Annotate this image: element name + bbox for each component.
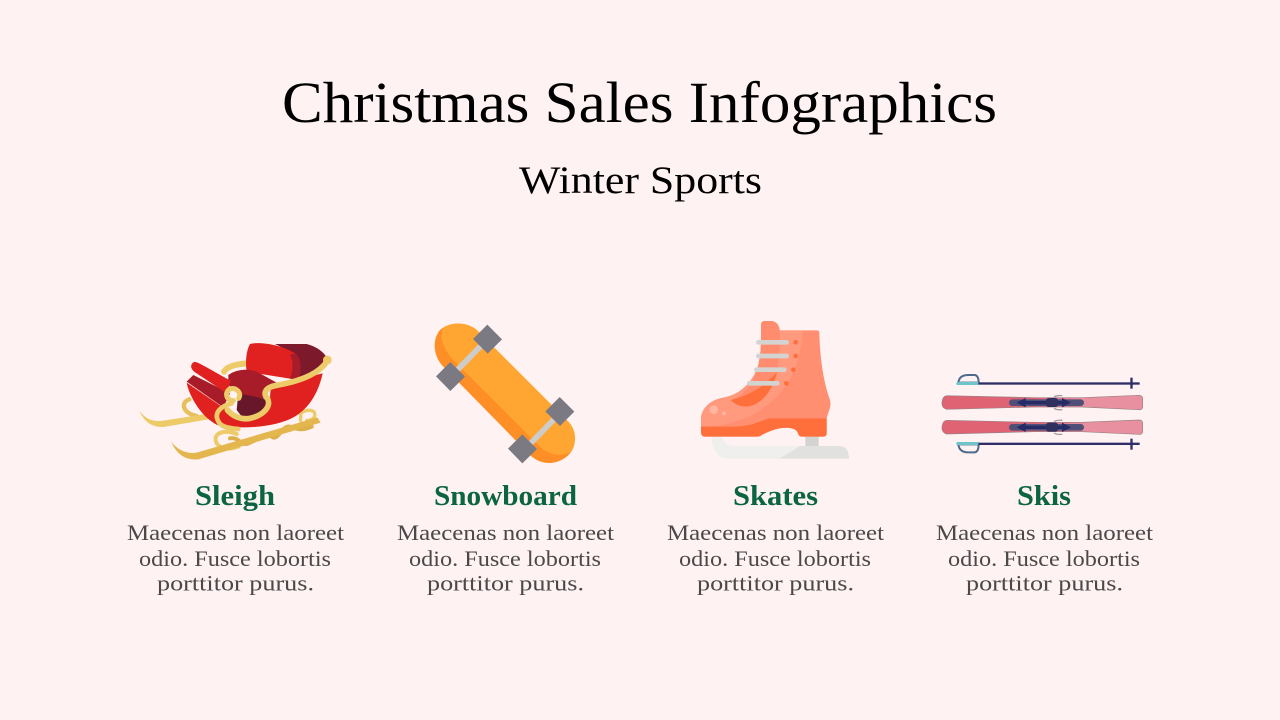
heading: Snowboard: Snowboard (434, 481, 577, 512)
panel: skis (936, 375, 1153, 596)
text block: Skates description: Maecenas non laoreet (667, 520, 884, 545)
icon: snowboard (435, 324, 575, 463)
heading: Skis: Skis (1017, 481, 1071, 512)
icon: skis and poles (942, 375, 1143, 452)
front runner (171, 417, 321, 460)
text block: Sleigh description: porttitor purus. (157, 570, 314, 596)
heading: Skates: Skates (733, 481, 818, 512)
text block: Skis description: Maecenas non laoreet (936, 520, 1153, 545)
panel: skates (667, 321, 884, 596)
heading: Sleigh: Sleigh (195, 481, 275, 512)
text block: Skates description: odio. Fusce lobortis (679, 546, 871, 571)
subtitle: Winter Sports (519, 159, 762, 202)
panel: sleigh (127, 343, 344, 596)
back runner (139, 410, 208, 427)
icon: ice skate (701, 321, 849, 459)
text block: Skates description (667, 520, 884, 596)
text block: Snowboard description (397, 520, 614, 596)
text block: Skis description (936, 520, 1153, 596)
text block: Sleigh description (127, 520, 344, 596)
panel: snowboard (397, 324, 614, 596)
text block: Snowboard description: porttitor purus. (427, 570, 584, 596)
text block: Snowboard description: odio. Fusce lobortis (409, 546, 601, 571)
title: Christmas Sales Infographics (282, 70, 997, 135)
icon: sleigh (139, 343, 332, 460)
text block: Sleigh description: odio. Fusce lobortis (139, 546, 331, 571)
text block: Skis description: odio. Fusce lobortis (948, 546, 1140, 571)
text block: Skates description: porttitor purus. (697, 570, 854, 596)
text block: Skis description: porttitor purus. (966, 570, 1123, 596)
text block: Snowboard description: Maecenas non laoreet (397, 520, 614, 545)
text block: Sleigh description: Maecenas non laoreet (127, 520, 344, 545)
